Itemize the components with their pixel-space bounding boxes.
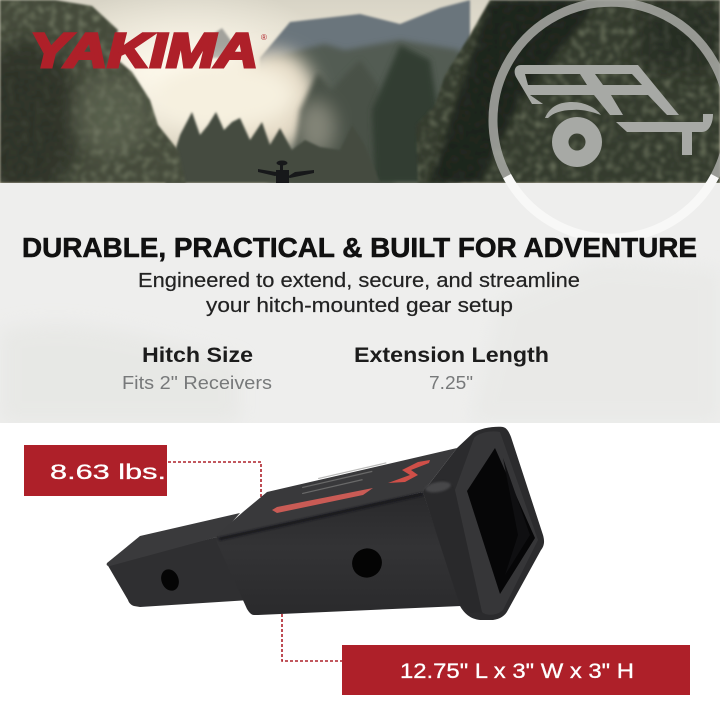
dotted connector: weight — [168, 462, 261, 498]
top face with label — [217, 448, 457, 538]
collar — [423, 427, 544, 620]
spec: hitch size — [122, 344, 272, 393]
receiver opening — [467, 448, 535, 594]
callout: dimensions: 12.75" L x 3" W x 3" H — [400, 659, 634, 683]
dotted connector: dimensions — [282, 614, 342, 661]
spec: hitch size: Fits 2" Receivers — [122, 373, 272, 393]
spec: extension length: Extension Length — [354, 344, 549, 367]
large tube — [216, 448, 461, 615]
ring — [493, 2, 720, 238]
right tree mass — [410, 0, 720, 183]
small tube — [107, 513, 250, 607]
spec: extension length: 7.25" — [429, 373, 473, 393]
background photo: misty forest — [0, 0, 720, 200]
translucent white panel — [0, 183, 720, 423]
heading: DURABLE, PRACTICAL & BUILT FOR ADVENTURE — [22, 232, 697, 263]
subheading: Engineered to extend, secure, and streamline — [138, 270, 580, 292]
callout: weight: 8.63 lbs. — [50, 460, 166, 484]
logo: YAKIMA: ® — [261, 33, 267, 42]
left tree mass — [0, 0, 186, 183]
callout: weight — [24, 445, 167, 496]
subheading: your hitch-mounted gear setup — [206, 295, 513, 317]
spec: extension length — [354, 344, 549, 393]
callout: dimensions — [342, 645, 690, 695]
distant tree line — [268, 40, 460, 183]
hitch extender product — [107, 427, 544, 620]
icon: trailer in circle — [493, 2, 720, 238]
spec: hitch size: Hitch Size — [142, 344, 253, 367]
bike handlebar silhouette — [258, 160, 314, 184]
midground conifers — [165, 112, 380, 183]
subheading — [138, 270, 580, 317]
logo: YAKIMA: YAKIMA — [30, 25, 258, 78]
